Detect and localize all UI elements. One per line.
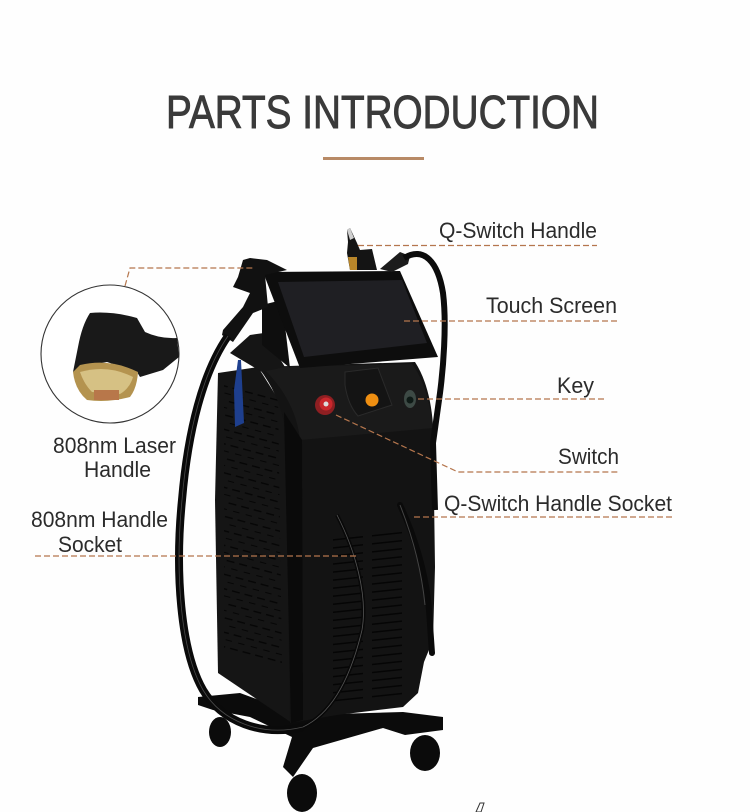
handle body: [73, 313, 179, 377]
control panel: [262, 364, 433, 440]
leader: touch screen: [404, 320, 617, 322]
shelf tray: [230, 333, 285, 372]
label: 808nm Laser Handle: 808nm Laser: [53, 433, 176, 458]
leader: switch: [336, 415, 618, 472]
label: Touch Screen: Touch Screen: [486, 293, 617, 318]
blue tool: [234, 360, 244, 427]
label: 808nm Laser Handle: [53, 433, 176, 482]
gold tip: [73, 363, 138, 401]
title: PARTS INTRODUCTION: [166, 86, 599, 138]
label: Switch: Switch: [558, 444, 619, 469]
laser window: [94, 390, 119, 400]
q-switch socket hose: [400, 505, 432, 653]
leader: q-switch handle socket: [414, 516, 672, 518]
q-switch handle holder and cable: [380, 252, 445, 510]
dashed leader lines: [35, 246, 672, 556]
callout: 808nm laser handle inset: [41, 285, 179, 423]
cabinet side panel: [215, 367, 292, 723]
front vents: [333, 527, 402, 705]
screen mount: [262, 300, 290, 368]
leader: q-switch handle: [358, 244, 597, 246]
808nm handle main cable: [179, 336, 363, 730]
touch screen: [263, 271, 438, 368]
side column shading: [284, 412, 303, 723]
side panel vents: [224, 380, 282, 665]
808nm laser handle: [222, 258, 287, 342]
label: Key: Key: [557, 373, 594, 398]
title underline: [323, 157, 424, 160]
base stand: [198, 693, 443, 812]
red emergency switch: [315, 395, 335, 415]
inset circle: [41, 285, 179, 423]
label: Q-Switch Handle Socket: Q-Switch Handle Socket: [444, 491, 672, 516]
machine illustration: [179, 228, 445, 812]
key switch: [404, 390, 416, 408]
leader: key: [418, 398, 605, 400]
leader: 808nm laser handle: [125, 268, 253, 286]
label: Q-Switch Handle: Q-Switch Handle: [439, 218, 597, 243]
label: 808nm Handle Socket: [31, 507, 168, 557]
cabinet front: [258, 362, 435, 723]
next section fragment at bottom edge: [476, 803, 484, 812]
q-switch handle: [347, 228, 377, 270]
orange key button panel: [345, 368, 392, 416]
label: 808nm Handle Socket: Socket: [58, 532, 122, 557]
label: 808nm Handle Socket: 808nm Handle: [31, 507, 168, 532]
leader: 808nm handle socket: [35, 555, 356, 557]
label: 808nm Laser Handle: Handle: [84, 457, 151, 482]
